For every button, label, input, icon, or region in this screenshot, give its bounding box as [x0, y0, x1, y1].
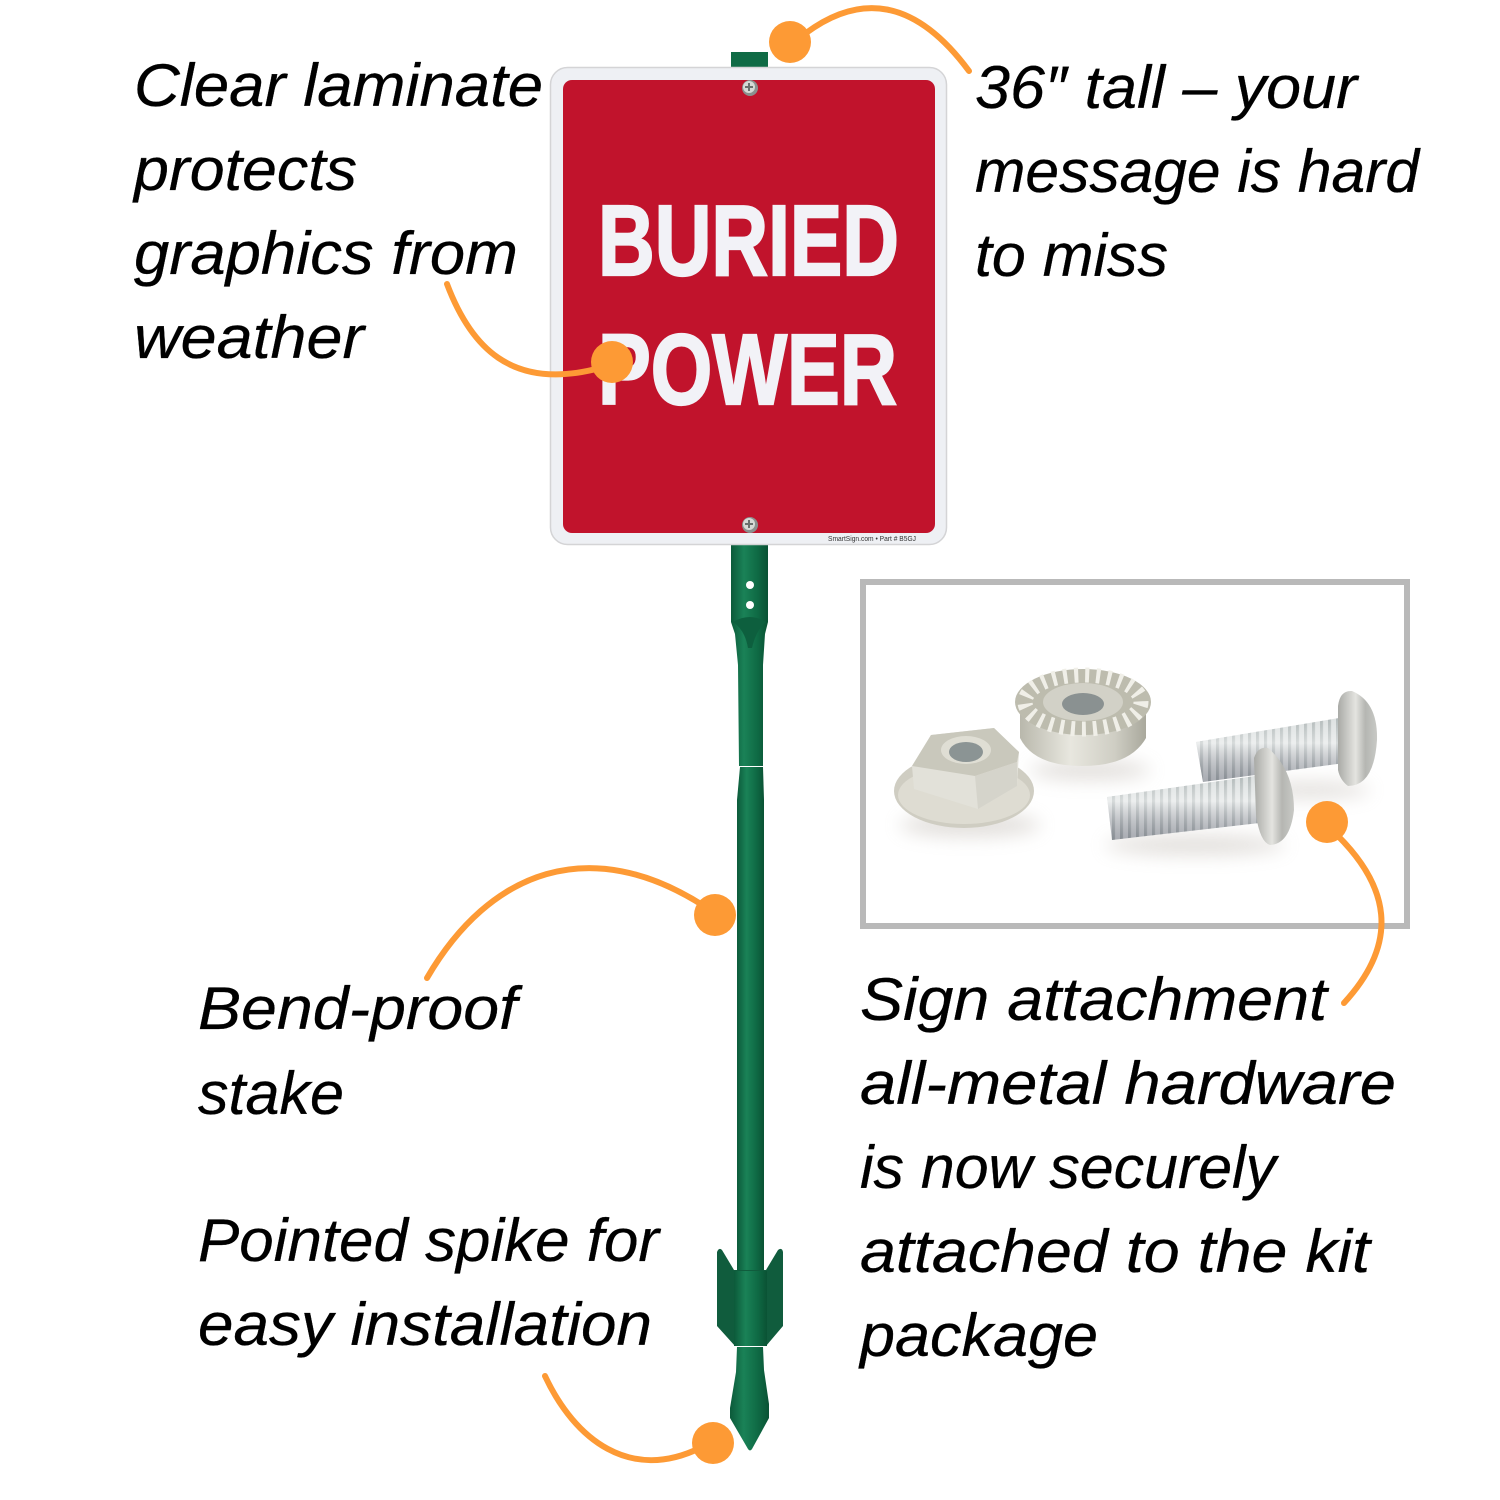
stake top tab — [731, 52, 768, 68]
callout text: Bend-proof — [198, 975, 523, 1042]
sign panel — [550, 68, 946, 544]
callout text: all-metal hardware — [860, 1050, 1396, 1117]
photo shadows — [900, 760, 1370, 855]
bolt front — [1107, 748, 1294, 845]
callout text: package — [858, 1302, 1098, 1369]
callout text — [858, 966, 1396, 1369]
callout text: easy installation — [198, 1291, 652, 1358]
callout text — [198, 1207, 661, 1358]
stake shaft lower — [737, 767, 764, 1270]
bolt back — [1196, 691, 1377, 786]
stake shaft upper — [731, 545, 768, 766]
callout text: message is hard — [975, 138, 1421, 205]
callout: laminate — [132, 52, 633, 383]
callout text: Sign attachment — [860, 966, 1330, 1033]
sign red face — [563, 80, 935, 533]
callout arrow — [1338, 836, 1382, 1003]
sign white backing — [550, 68, 946, 544]
callout arrow — [447, 284, 600, 374]
photo frame — [863, 582, 1407, 926]
callout text: Clear laminate — [134, 52, 543, 119]
stake — [717, 52, 783, 1450]
screw top — [742, 80, 758, 96]
sign text: BURIED — [598, 185, 899, 297]
callout text: protects — [132, 136, 357, 203]
flange nut front — [894, 728, 1034, 828]
callout text: weather — [134, 304, 366, 371]
sign text: POWER — [598, 314, 897, 426]
panel: hardware photo — [863, 582, 1407, 926]
callout: hardware — [858, 801, 1396, 1369]
stake spike — [730, 1347, 769, 1450]
callout text: graphics from — [134, 220, 518, 287]
stake fins — [717, 1249, 783, 1346]
flange nut back — [1015, 669, 1151, 766]
callout text: attached to the kit — [860, 1218, 1372, 1285]
callout text: stake — [198, 1060, 344, 1127]
sign text — [598, 185, 899, 426]
callout text: is now securely — [860, 1134, 1280, 1201]
callout text — [198, 975, 523, 1127]
callout: stake — [198, 868, 736, 1127]
callout arrow — [545, 1376, 700, 1460]
callout text — [975, 54, 1421, 289]
callout text: Pointed spike for — [198, 1207, 661, 1274]
callout: spike — [198, 1207, 734, 1464]
callout arrow — [806, 8, 969, 71]
callout arrow — [427, 868, 704, 978]
callout: height — [769, 8, 1421, 289]
callout text — [132, 52, 543, 371]
sign part number: SmartSign.com • Part # B5GJ — [828, 536, 916, 543]
callout text: 36″ tall – your — [975, 54, 1359, 121]
callout text: to miss — [975, 222, 1168, 289]
screw bottom — [742, 517, 758, 533]
